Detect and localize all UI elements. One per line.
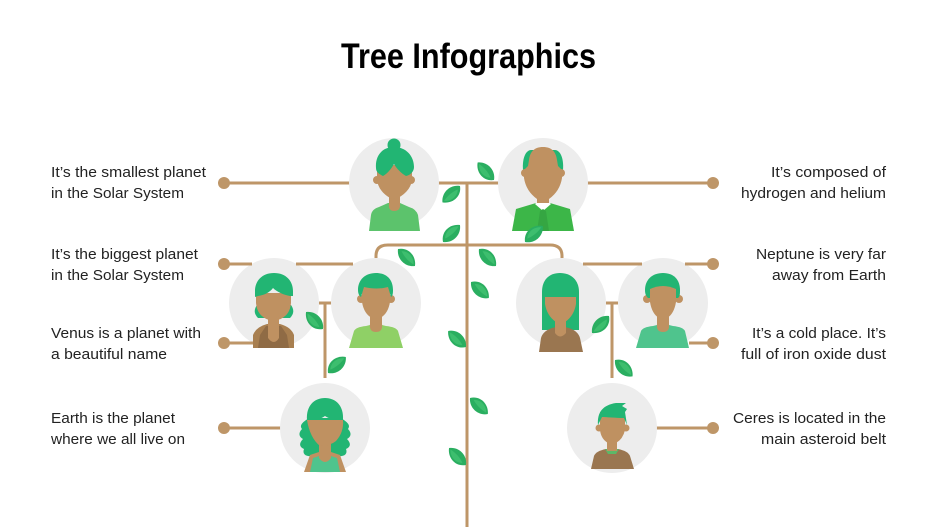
text: smallest planet <box>51 165 206 202</box>
text: Earth: where we all live on <box>50 432 185 448</box>
avatar: woman with long hair <box>516 258 606 352</box>
text: smallest planet: in the Solar System <box>51 186 184 202</box>
text: Neptune <box>756 247 886 284</box>
connector: top left <box>218 177 360 189</box>
connector: bottom right <box>650 422 719 434</box>
connector: top right <box>570 177 719 189</box>
connector: bottom left <box>218 422 290 434</box>
avatar: man teal shirt <box>618 258 708 348</box>
text: Venus: a beautiful name <box>51 347 167 363</box>
text: Earth: Earth is the planet <box>51 411 175 427</box>
leaves <box>302 158 637 470</box>
text: cold place <box>741 326 886 363</box>
text: biggest planet <box>51 247 198 284</box>
avatar: woman with short bob <box>229 258 319 348</box>
text: hydrogen and helium: It’s composed of <box>771 165 887 181</box>
text: Neptune: Neptune is very far <box>756 247 886 263</box>
connector: third left <box>218 337 253 349</box>
avatar: young man light green shirt <box>331 258 421 348</box>
connector: second right <box>583 258 719 270</box>
text: cold place: full of iron oxide dust <box>741 347 886 363</box>
text: biggest planet: in the Solar System <box>51 268 184 284</box>
text: Neptune: away from Earth <box>772 268 886 284</box>
connector: third right <box>689 337 719 349</box>
text: cold place: It’s a cold place. It’s <box>752 326 886 342</box>
text: hydrogen and helium <box>741 165 887 202</box>
text: hydrogen and helium: hydrogen and helium <box>741 186 886 202</box>
avatar: woman with bun <box>349 138 439 231</box>
title: Tree Infographics <box>341 37 596 76</box>
text: Ceres: Ceres is located in the <box>733 411 886 427</box>
connector: second left <box>218 258 353 270</box>
text: Venus <box>51 326 201 363</box>
avatar: boy with spiky hair <box>567 383 657 473</box>
text: Venus: Venus is a planet with <box>51 326 201 342</box>
text: biggest planet: It’s the biggest planet <box>51 247 198 263</box>
text: Ceres <box>733 411 886 448</box>
text: Earth <box>50 411 185 448</box>
text: Ceres: main asteroid belt <box>761 432 886 448</box>
avatar: balding man <box>498 138 588 231</box>
text: smallest planet: It’s the smallest planet <box>51 165 206 181</box>
tree trunk and branches <box>319 183 618 527</box>
avatar: woman with curly hair <box>280 383 370 473</box>
